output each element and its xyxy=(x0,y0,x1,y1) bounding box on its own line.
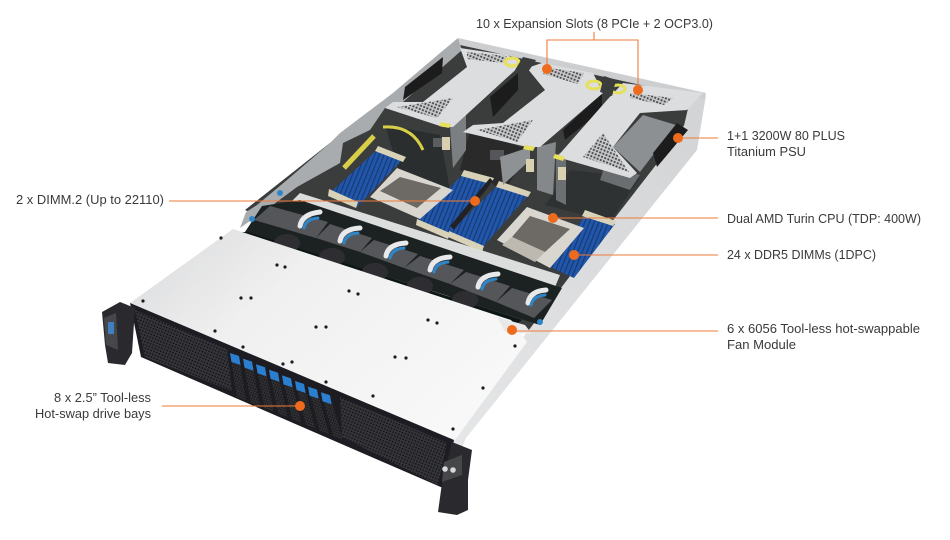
black riser cards xyxy=(403,57,602,140)
bracket vents xyxy=(397,52,673,172)
fan bay xyxy=(232,200,562,330)
left chassis wall xyxy=(240,38,462,228)
airflow duct xyxy=(613,115,676,172)
power connectors xyxy=(442,137,566,180)
dot: CPU xyxy=(548,213,558,223)
fan tray corner xyxy=(497,317,532,334)
callout: PSU xyxy=(673,129,845,159)
label: drive bays line 2: Hot-swap drive bays xyxy=(35,407,151,421)
label: PSU: 1+1 3200W 80 PLUS xyxy=(727,129,845,143)
dot: drive bays xyxy=(295,401,305,411)
callout: DDR5 xyxy=(569,248,876,262)
label: fan module: 6 x 6056 Tool-less hot-swappable xyxy=(727,322,920,336)
front mesh right xyxy=(340,397,447,485)
blue fan-latch screws xyxy=(249,190,543,325)
leader: PSU xyxy=(678,137,718,139)
dot: DIMM.2 xyxy=(470,196,480,206)
callout: DIMM.2 xyxy=(16,193,480,207)
front bezel xyxy=(130,303,454,488)
server illustration xyxy=(102,38,706,515)
riser latches xyxy=(515,57,616,96)
white air shroud strip xyxy=(268,193,560,292)
leader: fan module xyxy=(512,330,718,332)
label: DDR5: 24 x DDR5 DIMMs (1DPC) xyxy=(727,248,876,262)
label: PSU line 2: Titanium PSU xyxy=(727,145,806,159)
top cover xyxy=(130,229,527,440)
PSU handle xyxy=(653,123,688,167)
dot: fan module xyxy=(507,325,517,335)
label: expansion slots: 10 x Expansion Slots (8 PCIe + 2 OCP3.0) xyxy=(476,17,713,31)
yellow thumb rings xyxy=(505,58,625,93)
label: fan module line 2: Fan Module xyxy=(727,338,796,352)
label: CPU: Dual AMD Turin CPU (TDP: 400W) xyxy=(727,212,921,226)
callout: expansion slots xyxy=(476,17,713,95)
riser brackets xyxy=(385,48,703,178)
dot: right slot xyxy=(633,85,643,95)
leader: DIMM.2 xyxy=(169,200,475,202)
chassis interior xyxy=(245,42,705,335)
dot: left slot xyxy=(542,64,552,74)
callout: fan module xyxy=(507,322,920,352)
cover screws and holes xyxy=(141,236,517,431)
riser bracket uprights xyxy=(450,115,566,205)
right handle xyxy=(438,442,472,515)
front mesh left xyxy=(135,310,232,391)
label: DIMM.2: 2 x DIMM.2 (Up to 22110) xyxy=(16,193,164,207)
dot: DDR5 xyxy=(569,250,579,260)
DIMM slots xyxy=(328,146,616,278)
left handle xyxy=(102,302,135,365)
yellow tags xyxy=(439,122,565,161)
fan handles xyxy=(300,212,546,305)
dot: PSU xyxy=(673,133,683,143)
leader: drive bays xyxy=(162,405,300,407)
callout: CPU xyxy=(548,212,921,226)
yellow cables xyxy=(344,127,423,168)
leader: expansion slots xyxy=(547,32,638,90)
CPU sockets xyxy=(370,168,584,268)
label: drive bays: 8 x 2.5” Tool-less xyxy=(54,391,151,405)
right side wall xyxy=(448,95,706,462)
motherboard detail xyxy=(385,125,640,222)
leader: DDR5 xyxy=(574,254,718,256)
leader: CPU xyxy=(553,217,718,219)
rear top edge xyxy=(458,38,706,99)
callout: drive bays xyxy=(35,391,305,421)
drive bays xyxy=(230,353,343,439)
